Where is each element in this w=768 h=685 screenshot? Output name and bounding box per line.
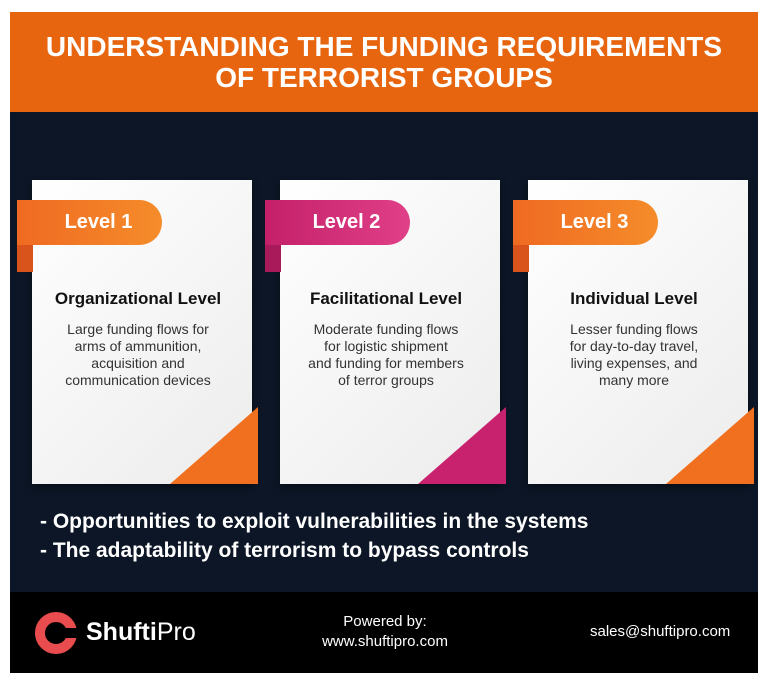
ribbon: level 2: Level 2	[313, 211, 380, 233]
card 1 text: arms of ammunition,	[75, 338, 201, 354]
header banner: UNDERSTANDING THE FUNDING REQUIREMENTS	[46, 31, 722, 62]
bullet points	[40, 510, 588, 562]
powered by: www.shuftipro.com	[322, 633, 448, 650]
card 2	[280, 180, 500, 484]
card 3 text: for day-to-day travel,	[570, 338, 698, 354]
card 1 text: Large funding flows for	[67, 321, 209, 337]
ribbon: level 3: Level 3	[561, 211, 628, 233]
card 1 text: acquisition and	[91, 355, 185, 371]
card 2 heading: Facilitational Level	[310, 289, 462, 308]
card 3	[528, 180, 748, 484]
card 3 text: Lesser funding flows	[570, 321, 698, 337]
footer	[10, 592, 758, 673]
ribbon: level 3	[513, 200, 658, 245]
card 1 heading: Organizational Level	[55, 289, 221, 308]
ribbon: level 1	[17, 200, 162, 245]
card 2 text	[308, 321, 464, 388]
card 1 text: communication devices	[65, 372, 211, 388]
card 2 text: Moderate funding flows	[314, 321, 458, 337]
card 1	[32, 180, 252, 484]
powered by: Powered by:	[343, 613, 427, 630]
card 1 text	[65, 321, 211, 388]
card 3 text: many more	[599, 372, 669, 388]
card 3 text	[570, 321, 698, 388]
card 3 heading: Individual Level	[570, 289, 698, 308]
card 2 text: for logistic shipment	[324, 338, 448, 354]
bullet points: - Opportunities to exploit vulnerabilities in the systems	[40, 510, 588, 533]
header banner: OF TERRORIST GROUPS	[215, 62, 553, 93]
powered by	[322, 613, 448, 650]
dark main panel	[10, 112, 758, 592]
ribbon tails	[17, 222, 33, 272]
logo text: ShuftiPro	[86, 618, 196, 646]
logo icon	[35, 612, 76, 654]
card 3 text: living expenses, and	[571, 355, 697, 371]
card 2 text: of terror groups	[338, 372, 434, 388]
bullet points: - The adaptability of terrorism to bypass controls	[40, 539, 529, 562]
ribbon: level 2	[265, 200, 410, 245]
ribbon: level 1: Level 1	[65, 211, 132, 233]
email: sales@shuftipro.com	[590, 623, 730, 640]
header banner	[10, 12, 758, 112]
card 2 text: and funding for members	[308, 355, 464, 371]
